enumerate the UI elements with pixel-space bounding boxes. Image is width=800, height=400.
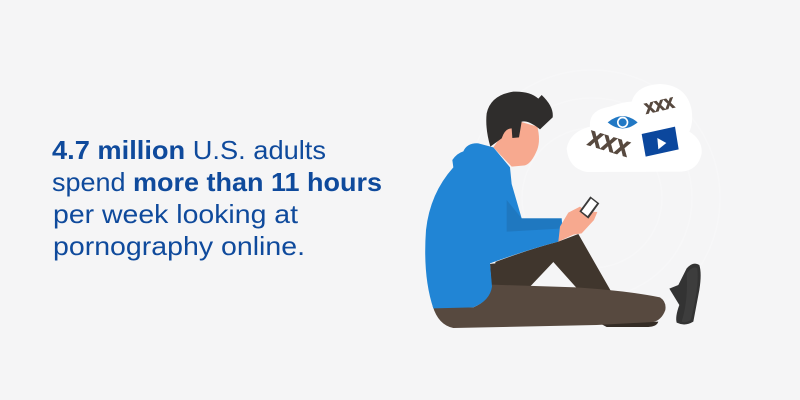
phone [579,196,599,219]
raised leg [490,234,611,291]
text block: statistic [52,135,382,261]
hair [486,92,553,147]
hand [558,207,597,242]
line 3: per week looking at [53,199,299,229]
icon: video play [642,127,679,157]
line 2: spend more than 11 hours [52,167,382,197]
line 4: pornography online. [53,231,305,261]
neck and face [493,122,539,167]
icon: eye [608,116,638,128]
hoodie [425,143,563,308]
shirt hem [487,257,496,264]
label: small xxx: xxx [642,92,677,119]
thought cloud [567,84,702,172]
label: large xxx: xxx [585,121,635,163]
extended leg [433,285,666,328]
shoe [669,264,701,324]
illustration: man looking at phone [425,84,702,328]
line 1: 4.7 million U.S. adults [52,135,326,165]
